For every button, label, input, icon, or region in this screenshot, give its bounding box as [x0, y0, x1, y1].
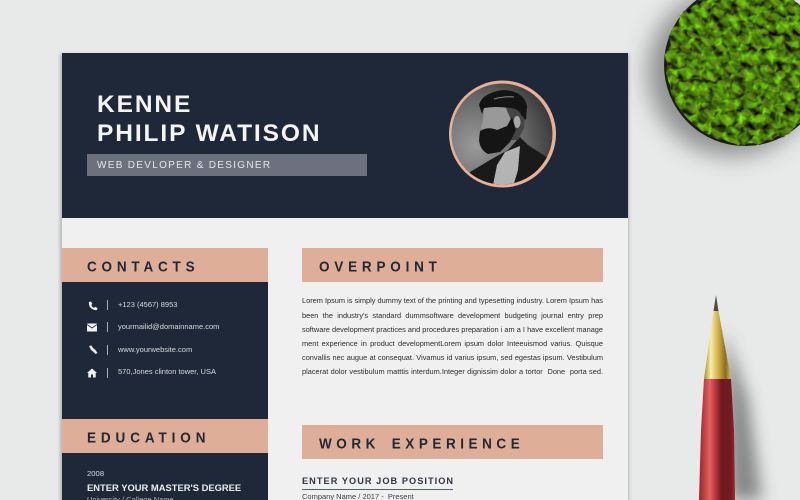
- red barrel: [699, 379, 735, 500]
- contact phone: +123 (4567) 8953: [118, 300, 177, 309]
- overpoint paragraph: placerat dolor vestibulum matttis interdum.Integer dignissim dolor a tortor Done porta sed.: [302, 367, 603, 376]
- contacts heading bar: [62, 248, 268, 282]
- work experience heading bar: WORK EXPERIENCE: [319, 435, 524, 452]
- education heading bar: [62, 419, 268, 453]
- overpoint paragraph: ment experience in product developmentLorem ipsum dolor Inteeuismod varius. Quisque: [302, 339, 603, 348]
- work experience heading bar: [302, 425, 603, 459]
- side of head: [505, 108, 526, 140]
- icon: home: [87, 368, 97, 378]
- overpoint paragraph: [302, 296, 603, 376]
- face: [481, 107, 511, 130]
- jacket: [470, 137, 547, 184]
- education heading bar: EDUCATION: [87, 429, 210, 446]
- overpoint paragraph: software development practices and procedures preparation i am a I have excellent manage: [302, 325, 603, 334]
- overpoint paragraph: Lorem Ipsum is simply dummy text of the printing and typesetting industry. Lorem Ipsum has: [302, 296, 603, 305]
- name heading: PHILIP WATISON: [97, 120, 321, 147]
- overpoint heading bar: [302, 248, 603, 282]
- contact website: www.yourwebsite.com: [118, 345, 192, 354]
- job position underline: [302, 489, 453, 490]
- name heading: KENNE: [97, 91, 192, 118]
- overpoint heading bar: OVERPOINT: [319, 258, 442, 275]
- header band: [62, 53, 628, 218]
- beard: [479, 117, 516, 154]
- contacts heading bar: CONTACTS: [87, 258, 199, 275]
- job title bar: WEB DEVLOPER & DESIGNER: [97, 160, 271, 171]
- pot: [664, 0, 800, 146]
- pen: [699, 295, 735, 500]
- overpoint paragraph: convallis nec augue at consequat. Vivamus id varius ipsum, sed egestas ipsum. Vestibulum: [302, 353, 603, 362]
- icon: envelope: [87, 324, 97, 332]
- name heading: [97, 91, 321, 147]
- separator: [107, 300, 108, 310]
- separator: [107, 368, 108, 378]
- plant in pot: [664, 0, 800, 146]
- panel: contacts sidebar: [62, 282, 268, 500]
- hair: [479, 90, 527, 120]
- gold cone: [704, 311, 731, 379]
- icon: website cursor: [89, 346, 98, 354]
- education degree: ENTER YOUR MASTER'S DEGREE: [87, 482, 241, 493]
- separator: [107, 345, 108, 355]
- separator: [107, 322, 108, 332]
- job position heading: ENTER YOUR JOB POSITION: [302, 476, 454, 486]
- icon: phone: [88, 302, 98, 310]
- education year: 2008: [87, 469, 104, 478]
- job title bar: [87, 154, 367, 176]
- neck and chest: [493, 146, 520, 184]
- contact email: yourmailid@domainname.com: [118, 322, 219, 331]
- overpoint paragraph: been the industry's standard dummsoftware development budgeting journal entry prep: [302, 311, 603, 320]
- portrait photo: [449, 80, 556, 188]
- ear: [514, 116, 520, 128]
- foliage: [666, 0, 800, 144]
- contact address: 570,Jones clinton tower, USA: [118, 367, 216, 376]
- nib: [714, 295, 718, 311]
- resume page: [62, 53, 628, 500]
